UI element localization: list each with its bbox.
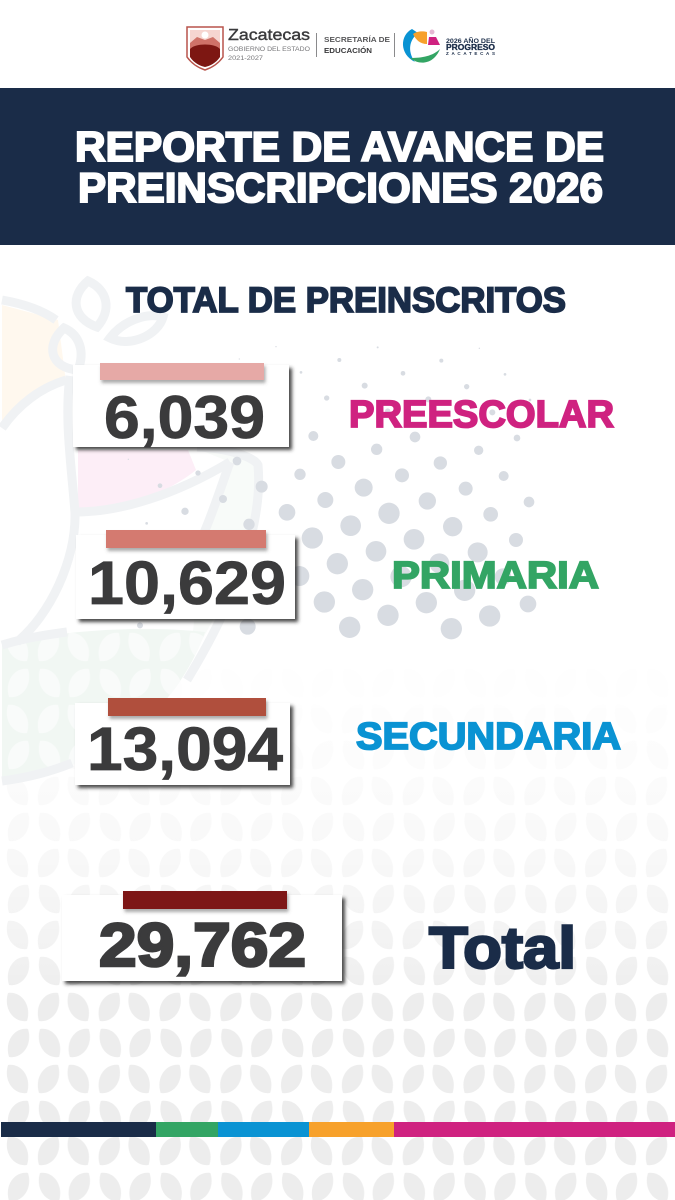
title text: REPORTE DE AVANCE DE (75, 123, 604, 170)
watermark: dove outline (2, 281, 259, 781)
icon: 2026 dove emblem (403, 29, 440, 63)
label: primaria: PRIMARIA (392, 555, 599, 597)
divider (316, 33, 317, 57)
divider (394, 33, 395, 57)
card: primaria (76, 530, 295, 619)
icon: Zacatecas shield (187, 27, 223, 70)
label: total: Total (429, 916, 576, 981)
decorative dot cluster (128, 346, 536, 639)
2026 Año del Progreso: 2026 AÑO DEL (446, 36, 495, 45)
card: preescolar (73, 363, 289, 451)
label: preescolar: PREESCOLAR (349, 394, 614, 436)
2026 Año del Progreso (446, 36, 495, 56)
subtitle: TOTAL DE PREINSCRITOS (126, 281, 566, 320)
2026 Año del Progreso: ZACATECAS (446, 51, 495, 56)
colour stripe footer (1, 1122, 675, 1137)
card: secundaria (75, 698, 290, 785)
title text: PREINSCRIPCIONES 2026 (78, 164, 603, 211)
Zacatecas wordmark: GOBIERNO DEL ESTADO (228, 46, 310, 53)
logo header (187, 27, 495, 70)
card: total (62, 891, 342, 981)
Secretaría de Educación (324, 35, 390, 55)
title text (75, 123, 604, 211)
title banner (0, 88, 675, 245)
2026 Año del Progreso: PROGRESO (446, 43, 495, 52)
Zacatecas wordmark: 2021-2027 (228, 55, 263, 62)
label: secundaria: SECUNDARIA (356, 716, 621, 758)
card: primaria: 10,629 (88, 549, 286, 617)
Zacatecas wordmark (228, 27, 310, 62)
card: total: 29,762 (99, 911, 306, 979)
background leaf pattern (0, 650, 675, 1200)
card: secundaria: 13,094 (87, 715, 283, 783)
Zacatecas wordmark: Zacatecas (228, 27, 310, 44)
card: preescolar: 6,039 (104, 384, 265, 451)
Secretaría de Educación: EDUCACIÓN (324, 46, 372, 55)
Secretaría de Educación: SECRETARÍA DE (324, 35, 390, 44)
